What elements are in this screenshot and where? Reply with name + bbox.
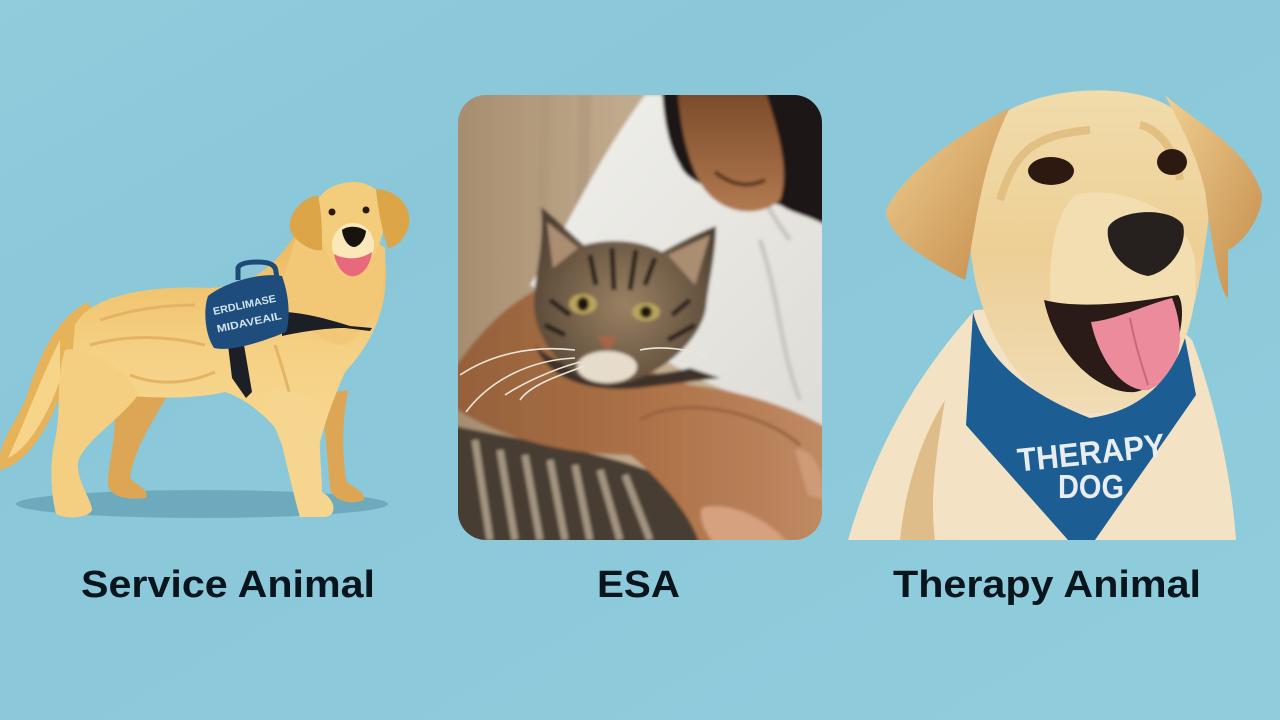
muzzle [332,223,374,267]
label: ESA: ESA [597,564,680,606]
tail [0,302,100,470]
muzzle [1050,192,1196,350]
cat muzzle [577,351,637,383]
mouth [1044,295,1182,392]
cat stripes [545,248,695,340]
bandana text [1016,434,1163,498]
arm [450,285,830,545]
hair [662,90,830,228]
near hind leg [51,349,138,517]
forehead marks [1000,125,1180,200]
head [315,182,384,277]
vest handle [238,262,278,284]
vest text [212,292,283,335]
label: Service Animal: Service Animal [81,564,375,606]
ears [290,195,322,250]
bandana text: DOG [1058,468,1124,505]
far front leg [320,390,364,502]
left eye [1028,157,1074,185]
fur strokes [90,305,300,445]
bandana [966,312,1196,540]
nose [342,227,366,247]
bandana text: THERAPY [1016,426,1167,479]
cat eyes [569,294,597,314]
ground shadow [16,490,388,518]
illustration: service dog [0,182,409,518]
head [969,90,1209,413]
mouth [334,252,372,276]
tongue [1091,298,1180,390]
whiskers [460,348,706,412]
vest [205,275,289,349]
right ear [1165,95,1262,298]
near front leg [262,391,334,517]
eyes [328,208,336,216]
right eye [1157,149,1187,175]
photo: woman holding a tabby cat [450,90,830,545]
vest straps [282,312,372,336]
wall and curtain [458,95,728,472]
cat body [535,345,720,389]
chest and body [848,300,1236,540]
illustration: therapy dog with bandana [848,90,1262,540]
cat head [534,207,716,385]
left ear [886,108,1010,280]
vest text: ERDLIMASE [212,293,277,318]
cat inner ears [547,222,578,268]
face [678,90,784,211]
body [72,235,386,450]
label: Therapy Animal: Therapy Animal [893,564,1201,606]
hand fingers [701,506,790,545]
vest text: MIDAVEAIL [216,310,283,335]
neck [280,230,385,345]
nose [1108,212,1184,276]
far hind leg [108,395,168,499]
shirt [530,95,830,430]
cat lower body [458,425,701,540]
